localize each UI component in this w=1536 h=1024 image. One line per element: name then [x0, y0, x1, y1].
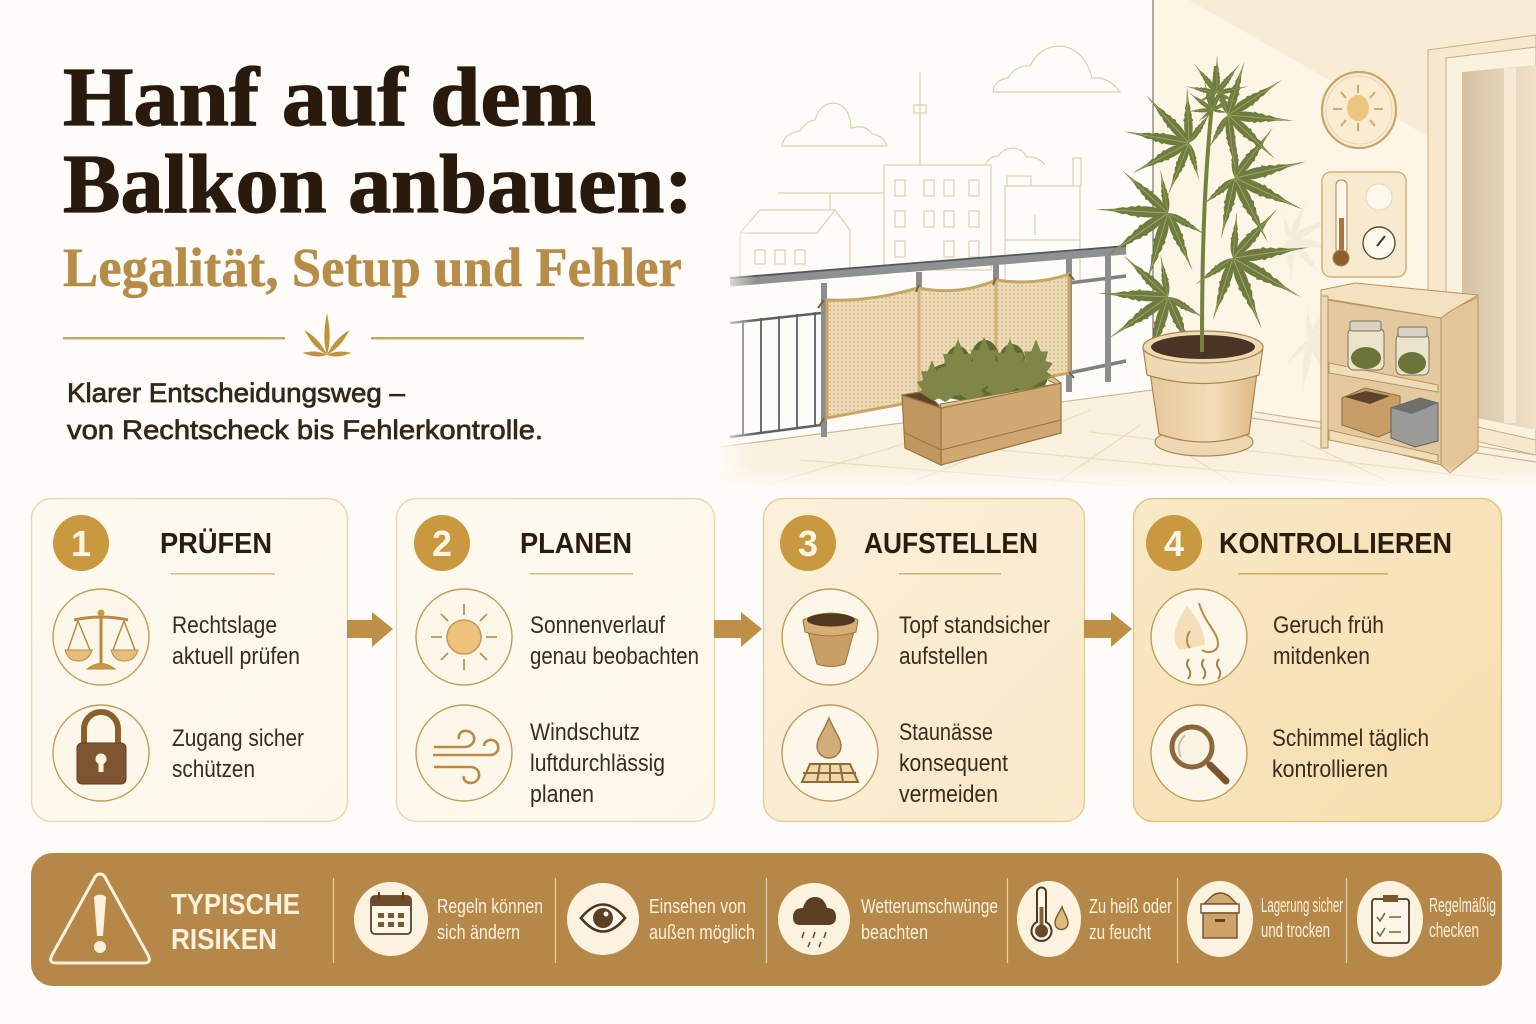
- risk: checklist clipboard: Regelmäßig: [1429, 895, 1496, 917]
- railing: [730, 246, 1126, 437]
- number badge 1: [53, 515, 109, 571]
- text: Schimmel täglich: [1272, 725, 1429, 752]
- text: genau beobachten: [530, 643, 699, 670]
- shelf with jars and boxes: [1321, 283, 1478, 473]
- risk: eye: [567, 883, 755, 955]
- title line 1: Hanf auf dem: [63, 51, 596, 144]
- text: [899, 719, 1008, 808]
- heading: AUFSTELLEN: [864, 528, 1038, 560]
- cannabis plant: [1071, 55, 1334, 388]
- tagline: von Rechtscheck bis Fehlerkontrolle.: [67, 415, 543, 445]
- city skyline sketch: [740, 46, 1120, 285]
- text: aktuell prüfen: [172, 643, 300, 670]
- subtitle gold: Legalität, Setup und Fehler: [63, 237, 682, 298]
- panel: step 4 Kontrollieren: [1134, 498, 1502, 822]
- icon: warning triangle: [51, 874, 149, 963]
- risk banner: [31, 853, 1502, 986]
- tagline: [67, 378, 543, 445]
- text: schützen: [172, 756, 255, 783]
- arrow 1 to 2: [347, 612, 393, 647]
- risk: checklist clipboard: [1357, 881, 1496, 957]
- text: Topf standsicher: [899, 612, 1050, 639]
- balcony illustration: [716, 0, 1536, 490]
- risk: thermometer and droplet: Zu heiß oder: [1089, 896, 1172, 918]
- heading: PRÜFEN: [160, 527, 272, 560]
- risk: calendar: Regeln können: [437, 896, 543, 918]
- icon: sun: [416, 589, 512, 685]
- text: [530, 612, 699, 670]
- text: Staunässe: [899, 719, 993, 746]
- text: [172, 612, 300, 670]
- text: [1273, 612, 1384, 670]
- risk: storage box: und trocken: [1261, 920, 1330, 942]
- text: aufstellen: [899, 643, 988, 670]
- wall sun dial: [1322, 72, 1396, 148]
- text: Zugang sicher: [172, 725, 304, 752]
- text: konsequent: [899, 750, 1008, 777]
- text: Geruch früh: [1273, 612, 1384, 639]
- text: luftdurchlässig: [530, 750, 665, 777]
- planter box with herbs: [902, 337, 1061, 465]
- privacy mesh screen: [818, 274, 1074, 426]
- icon: nose with smell: [1151, 589, 1247, 685]
- divider with leaf: [63, 313, 584, 357]
- number badge 3: 3: [798, 523, 818, 564]
- text: planen: [530, 781, 594, 808]
- wall and ceiling wedge: [1153, 0, 1536, 460]
- text: Sonnenverlauf: [530, 612, 665, 639]
- risk: storage box: Lagerung sicher: [1261, 895, 1343, 917]
- heading: TYPISCHE: [171, 889, 300, 921]
- title line 2: Balkon anbauen:: [63, 138, 693, 231]
- number badge 2: 2: [432, 523, 452, 564]
- number badge 2: [414, 515, 470, 571]
- heading: RISIKEN: [171, 924, 277, 956]
- number badge 1: 1: [71, 523, 91, 564]
- panel: step 1 Prüfen: [32, 498, 348, 822]
- text: [1272, 725, 1429, 783]
- title block: [63, 51, 693, 298]
- number badge 4: [1146, 515, 1202, 571]
- tagline: Klarer Entscheidungsweg –: [67, 378, 405, 408]
- heading: [171, 889, 300, 956]
- risk: calendar: sich ändern: [437, 922, 520, 944]
- text: Windschutz: [530, 719, 640, 746]
- risk: checklist clipboard: checken: [1429, 920, 1479, 942]
- risk: thermometer and droplet: zu feucht: [1089, 922, 1151, 944]
- risk: calendar: [354, 882, 543, 956]
- number badge 4: 4: [1164, 523, 1184, 564]
- icon: scales: [53, 589, 149, 685]
- arrow 3 to 4: [1084, 612, 1132, 647]
- risk: rain cloud: Wetterumschwünge: [861, 896, 998, 918]
- icon: plant pot: [782, 589, 878, 685]
- text: [899, 612, 1050, 670]
- text: vermeiden: [899, 781, 998, 808]
- panel: step 3 Aufstellen: [764, 498, 1084, 822]
- door frame: [1428, 35, 1536, 455]
- risk: eye: außen möglich: [649, 922, 755, 944]
- text: Rechtslage: [172, 612, 277, 639]
- panel: step 2 Planen: [396, 498, 714, 822]
- icon: magnifying glass: [1151, 705, 1247, 801]
- wall thermometer panel: [1322, 172, 1406, 277]
- icon: droplet over drain grid: [782, 705, 878, 801]
- text: [530, 719, 665, 808]
- risk: rain cloud: [778, 883, 998, 955]
- balcony floor tiles: [720, 390, 1536, 487]
- icon: padlock: [53, 705, 149, 801]
- fade to page background: [716, 0, 1536, 490]
- large terracotta pot: [1143, 318, 1263, 456]
- risk: rain cloud: beachten: [861, 922, 928, 944]
- icon: wind: [416, 705, 512, 801]
- risk: thermometer and droplet: [1017, 881, 1172, 957]
- text: mitdenken: [1273, 643, 1370, 670]
- risk: storage box: [1187, 881, 1343, 957]
- heading: KONTROLLIEREN: [1219, 528, 1452, 560]
- risk: eye: Einsehen von: [649, 896, 746, 918]
- heading: PLANEN: [520, 528, 632, 560]
- number badge 3: [780, 515, 836, 571]
- text: [172, 725, 304, 783]
- arrow 2 to 3: [714, 612, 762, 647]
- text: kontrollieren: [1272, 756, 1388, 783]
- faint leaf shadows on wall: [1268, 196, 1384, 408]
